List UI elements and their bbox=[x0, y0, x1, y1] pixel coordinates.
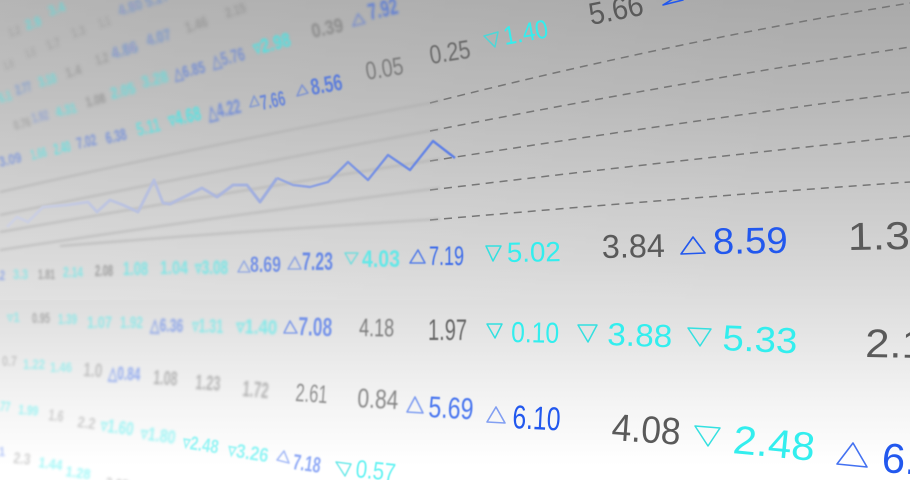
blurred gray value: 2.3 bbox=[13, 450, 31, 469]
value down 4.03: 4.03 bbox=[362, 246, 400, 273]
blurred cyan value: 1.99 bbox=[18, 401, 39, 419]
blue value: 6.38 bbox=[104, 125, 128, 148]
blurred gray value: 2.08 bbox=[95, 263, 113, 280]
value down 3.88 bbox=[578, 316, 673, 354]
value down 5.33 bbox=[688, 317, 798, 361]
cyan value: 2.40 bbox=[52, 138, 73, 159]
blurred cyan value: 1.92 bbox=[120, 313, 143, 332]
blurred cyan value: 1.39 bbox=[58, 311, 77, 328]
cyan value: 3.28 bbox=[139, 67, 170, 92]
value up 8.56 bbox=[297, 69, 344, 100]
value down 0.10 bbox=[487, 317, 559, 350]
value up 6.10 bbox=[487, 398, 562, 438]
value 0.05: 0.05 bbox=[364, 52, 405, 86]
value down 5.02: 5.02 bbox=[507, 236, 561, 268]
blurred cyan value: 1.08 bbox=[123, 259, 148, 279]
blue value: 2.77 bbox=[13, 78, 33, 98]
blurred cyan value: 1.04 bbox=[160, 258, 188, 278]
blurred gray value: 0.7 bbox=[2, 353, 17, 370]
gray value: 1.46 bbox=[183, 14, 210, 37]
blurred cyan value: ▿1.80 bbox=[139, 423, 177, 448]
icon: up triangle cut off bbox=[663, 0, 683, 5]
value 4.18: 4.18 bbox=[359, 314, 394, 343]
ticker row 3 bbox=[2, 353, 910, 480]
ticker row: top right bbox=[364, 0, 683, 86]
gray value: 1.7 bbox=[44, 34, 62, 53]
blurred cyan value: 1.46 bbox=[50, 359, 72, 375]
value 0.84: 0.84 bbox=[357, 383, 399, 415]
cyan value: 4.31 bbox=[54, 99, 78, 120]
blurred gray value: 1.0 bbox=[83, 360, 103, 382]
value up 8.59: 8.59 bbox=[712, 220, 788, 262]
mixed value: 1.92 bbox=[30, 106, 50, 126]
cyan value: 2.9 bbox=[23, 13, 43, 33]
blurred cyan value: ▿1.31 bbox=[191, 316, 224, 338]
blue value: △6.85 bbox=[171, 58, 207, 84]
gray value: 1.2 bbox=[93, 49, 110, 68]
gray value: 1.9 bbox=[2, 56, 16, 73]
value down 2.48: 2.48 bbox=[731, 418, 817, 470]
value down 3.88: 3.88 bbox=[607, 316, 673, 354]
value down 2.48 bbox=[695, 418, 817, 470]
value up 7.08: 7.08 bbox=[298, 311, 333, 342]
value up 7.18: 7.18 bbox=[291, 449, 323, 478]
value up 7.92 bbox=[353, 0, 400, 26]
value up 7.23 bbox=[288, 248, 333, 276]
cyan value: 2.05 bbox=[109, 80, 137, 103]
ticker row 4 bbox=[0, 397, 397, 480]
dashed guide lines bbox=[430, 3, 910, 220]
value 1.97: 1.97 bbox=[428, 314, 467, 347]
value down 1.40 bbox=[484, 14, 550, 51]
background sheen bbox=[0, 0, 910, 300]
blue value: 4.86 bbox=[109, 39, 140, 63]
value up 7.19 bbox=[410, 241, 464, 271]
gray value: 1.1 bbox=[96, 13, 112, 31]
blurred down 3.26: ▿3.26 bbox=[225, 439, 270, 467]
value up 5.69: 5.69 bbox=[428, 391, 474, 426]
gray value: 1.3 bbox=[69, 22, 87, 41]
value up 8.59 bbox=[681, 220, 788, 262]
blurred down 2.48: ▿2.48 bbox=[180, 432, 220, 459]
blurred upper ticker row four bbox=[2, 13, 210, 73]
value up 5.69 bbox=[407, 391, 474, 426]
blurred upper ticker row two bbox=[12, 0, 400, 133]
value up 8.69 bbox=[238, 252, 281, 277]
ticker row 2 bbox=[6, 309, 910, 367]
value up 7.08 bbox=[284, 311, 333, 342]
blurred upper ticker row three bbox=[0, 27, 173, 106]
ticker row 1 bbox=[0, 214, 910, 283]
blurred cyan value: ▿1.60 bbox=[99, 415, 135, 440]
value 1.08: 1.08 bbox=[153, 367, 178, 391]
value down 1.40: 1.40 bbox=[501, 14, 550, 51]
blue value: 7.02 bbox=[75, 132, 98, 153]
blurred cyan value: 1.22 bbox=[23, 356, 45, 372]
blurred cyan value: 1.07 bbox=[87, 313, 112, 332]
blurred guide lines on left bbox=[0, 101, 440, 250]
value 2.61: 2.61 bbox=[295, 379, 328, 409]
value 3.84: 3.84 bbox=[601, 227, 665, 265]
value down 5.33: 5.33 bbox=[722, 317, 798, 361]
value up 7.18 bbox=[277, 449, 323, 478]
blue value: 4.07 bbox=[144, 27, 173, 50]
blurred cyan value: ▿3.08 bbox=[194, 258, 228, 279]
gray value: 1.2 bbox=[7, 23, 23, 40]
value up 6 bbox=[837, 434, 910, 480]
gray value: 1.08 bbox=[84, 90, 107, 110]
gray value: 0.76 bbox=[12, 114, 32, 133]
value up 7.19: 7.19 bbox=[429, 241, 464, 271]
blurred blue value: △6.36 bbox=[149, 315, 184, 336]
value up 7.66: 7.66 bbox=[258, 87, 287, 115]
cyan value: ▿4.68 bbox=[166, 103, 203, 132]
blurred cyan value: 3.3 bbox=[13, 266, 28, 282]
value 1.72: 1.72 bbox=[242, 376, 270, 403]
blurred down 1.40: ▿1.40 bbox=[235, 316, 278, 339]
value 0.39: 0.39 bbox=[309, 15, 345, 43]
blurred cyan value: 2.14 bbox=[63, 264, 83, 281]
blurred gray value: 1.81 bbox=[38, 266, 55, 282]
cyan value: 3.10 bbox=[36, 70, 58, 90]
faded left part of chart bbox=[7, 178, 277, 227]
value down 0.10: 0.10 bbox=[511, 317, 559, 350]
line chart bbox=[7, 141, 455, 227]
cyan value: 1.66 bbox=[29, 144, 48, 164]
value 4.08: 4.08 bbox=[610, 407, 682, 454]
value up 8.69: 8.69 bbox=[250, 252, 281, 277]
blurred cyan value: ▿1 bbox=[6, 309, 20, 325]
blue value: △5.76 bbox=[208, 44, 247, 72]
value up 7.23: 7.23 bbox=[302, 248, 333, 276]
blurred gray value: 1.6 bbox=[48, 407, 65, 426]
value up 7.66 bbox=[250, 87, 287, 115]
value up 6.10: 6.10 bbox=[512, 398, 562, 438]
blurred gray value: 2.2 bbox=[77, 414, 97, 433]
value down 0.57 bbox=[336, 455, 397, 480]
value up 8.56: 8.56 bbox=[308, 69, 344, 100]
value 4.22: △4.22 bbox=[205, 96, 243, 125]
sharp right part of chart bbox=[277, 141, 455, 187]
value 1.23: 1.23 bbox=[195, 371, 221, 396]
blurred upper ticker row five bbox=[7, 0, 248, 40]
value 0.25: 0.25 bbox=[427, 34, 472, 70]
blurred blue value: △0.84 bbox=[107, 363, 141, 385]
value down 4.03 bbox=[345, 246, 400, 273]
ticker row 5 bbox=[0, 444, 130, 480]
gray value: 1.4 bbox=[63, 61, 83, 81]
cyan value: 5.11 bbox=[134, 115, 162, 140]
blurred cyan value: 1.44 bbox=[37, 454, 64, 474]
gray value: 1.5 bbox=[24, 44, 38, 61]
cyan value: ▿2.98 bbox=[250, 29, 293, 60]
blurred upper ticker row one bbox=[0, 69, 344, 171]
blurred gray value: 0.95 bbox=[32, 310, 50, 327]
